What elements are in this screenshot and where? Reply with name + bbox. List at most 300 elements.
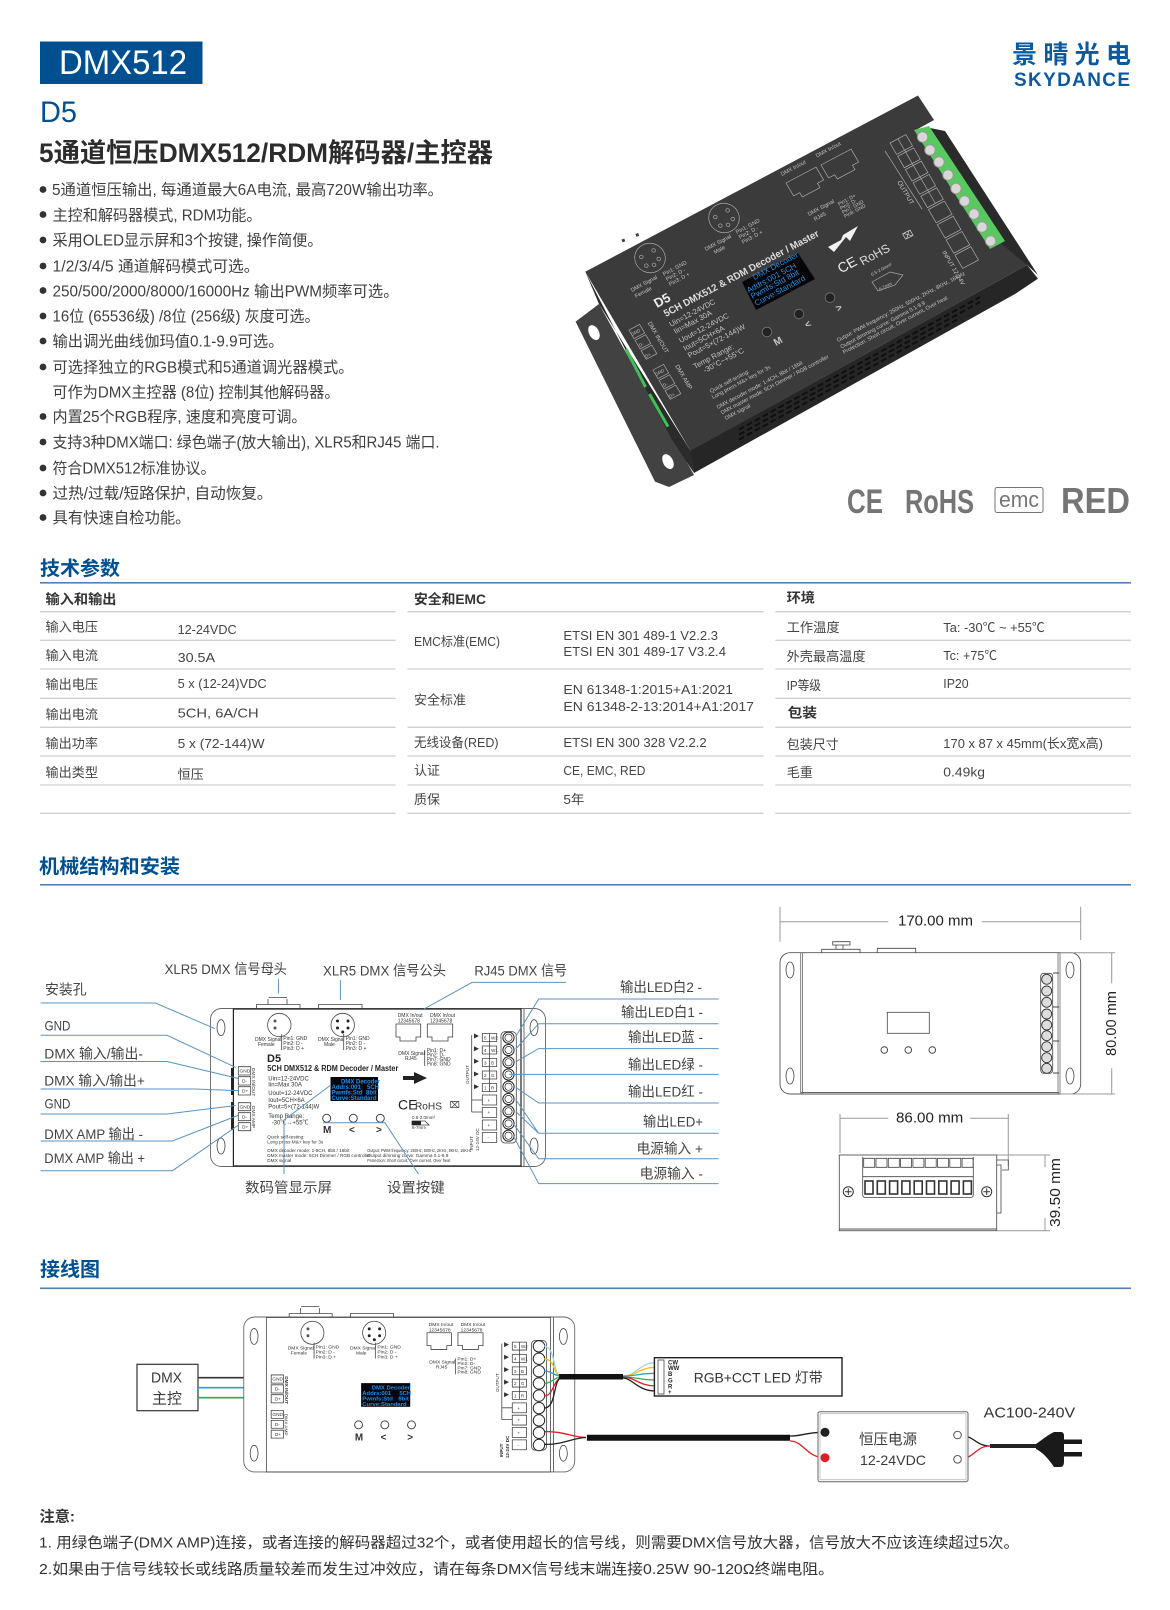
device schematic: Protection: Short circuit, Over current, Over heat <box>367 1158 451 1163</box>
device schematic: Temp Range: <box>268 1114 304 1120</box>
table column: input and output: 输入电压 <box>46 620 98 634</box>
device schematic: DMX Signal <box>429 1359 455 1365</box>
screen printing: DMX master mode: 5CH Dimmer / RGB controller <box>720 354 830 416</box>
device schematic: Curve:Standard <box>362 1402 407 1408</box>
LED strip box: CW <box>668 1360 678 1366</box>
device schematic: Pin3: D + <box>316 1354 336 1360</box>
device schematic: D+ <box>242 1088 248 1094</box>
device schematic: DMX AMP <box>283 1414 289 1436</box>
table column: environment and package: 环境 <box>787 590 815 606</box>
device schematic: W1 <box>491 1048 498 1053</box>
LED strip box <box>654 1358 842 1396</box>
output wires to LED strip <box>544 1346 655 1408</box>
device schematic: Pin2: D- <box>457 1361 475 1367</box>
table column: environment and package: 170 x 87 x 45mm(长x宽x高) <box>943 736 1103 751</box>
device schematic: 12345678 <box>429 1327 451 1333</box>
table column: input and output: 恒压 <box>178 767 204 782</box>
table column: input and output: 12-24VDC <box>178 622 237 637</box>
device schematic: DMX In/out <box>430 1013 456 1019</box>
device schematic: 2 <box>514 1381 517 1386</box>
signal wires <box>198 1378 271 1398</box>
device schematic: 0.5-2.0mm² <box>412 1115 436 1120</box>
device schematic: Pin1: GND <box>283 1036 308 1042</box>
callout labels: GND <box>44 1096 70 1112</box>
icon: AC plug <box>990 1432 1082 1467</box>
LED strip box: B <box>668 1372 673 1378</box>
device schematic: Iin=Max 30A <box>268 1082 302 1088</box>
device schematic: G <box>521 1381 525 1386</box>
feature list: 250/500/2000/8000/16000Hz 输出PWM频率可选。 <box>52 282 398 300</box>
screen printing: Pin8: GND <box>843 203 867 220</box>
table column: safety and EMC: EN 61348-1:2015+A1:2021 <box>563 682 733 697</box>
device schematic: INPUT <box>499 1443 504 1457</box>
device schematic: D+ <box>275 1396 281 1402</box>
section heading: 技术参数: 技术参数 <box>40 557 120 580</box>
device schematic: 3 <box>514 1369 517 1374</box>
green terminal left <box>626 349 668 427</box>
callout labels: XLR5 DMX 信号公头 <box>323 962 446 978</box>
device schematic: Pin2: D - <box>377 1350 397 1356</box>
device schematic: Male <box>324 1042 335 1048</box>
table column: environment and package <box>787 590 1103 780</box>
LED strip box: R <box>668 1384 673 1390</box>
callout labels: 安装孔 <box>45 982 87 998</box>
device schematic: 4 <box>484 1048 487 1053</box>
dimension drawing: top view <box>780 907 1120 1094</box>
device schematic: DMX In/out <box>461 1322 486 1328</box>
feature list: 过热/过载/短路保护, 自动恢复。 <box>52 484 272 502</box>
OLED screen: Curve:Standard <box>753 274 807 308</box>
device schematic: DMX Signal <box>350 1346 376 1352</box>
callout labels <box>44 961 703 1196</box>
screen printing: D5 <box>651 290 673 311</box>
callout labels: 输出LED白1 - <box>621 1004 703 1020</box>
table column: safety and EMC: CE, EMC, RED <box>563 763 645 778</box>
table column: safety and EMC: ETSI EN 301 489-1 V2.2.3 <box>563 628 718 643</box>
device schematic: DMX Decoder <box>341 1080 381 1086</box>
section heading: 接线图: 接线图 <box>40 1259 100 1281</box>
device schematic: W2 <box>521 1344 528 1349</box>
screen printing: Uout=12-24VDC <box>677 311 731 345</box>
header badge: DMX512: DMX512 <box>59 44 187 82</box>
screen printing: Quick self-testing: <box>709 369 751 395</box>
device schematic: DMX Signal <box>288 1346 314 1352</box>
device schematic: GND <box>272 1377 284 1383</box>
device schematic: Pin3: D + <box>283 1046 304 1052</box>
device schematic: Pin2: D - <box>346 1041 365 1047</box>
device schematic: 12-24V DC <box>475 1128 480 1151</box>
LED strip box: WW <box>668 1366 680 1372</box>
screen printing: DMX In/out <box>815 141 843 159</box>
device schematic: Pin1: GND <box>316 1345 340 1351</box>
device schematic <box>244 1307 575 1472</box>
callout labels: RJ45 DMX 信号 <box>474 962 567 978</box>
device schematic: 5 <box>514 1344 517 1349</box>
logo: SKYDANCE: SKYDANCE <box>1014 70 1130 91</box>
device schematic: OUTPUT <box>495 1373 500 1392</box>
OLED screen: DMX Decoder <box>751 250 800 282</box>
callout labels: DMX AMP 输出 - <box>44 1126 143 1142</box>
screen printing: RJ45 <box>813 212 827 223</box>
certification marks: CE <box>847 483 883 521</box>
device schematic: + <box>488 1098 490 1103</box>
table column: environment and package: 工作温度 <box>787 620 840 635</box>
callout labels: 数码管显示屏 <box>245 1180 332 1196</box>
feature list: 符合DMX512标准协议。 <box>52 460 216 478</box>
table column: environment and package: IP20 <box>943 676 969 691</box>
dimension drawing: end view <box>839 1110 1064 1231</box>
feature list <box>40 181 443 527</box>
table column: environment and package: 0.49kg <box>943 764 985 780</box>
table column: input and output: 5CH, 6A/CH <box>178 706 259 720</box>
device schematic: DMX Decoder <box>372 1386 411 1392</box>
table column: environment and package: IP等级 <box>787 678 821 693</box>
device schematic: D- <box>275 1422 280 1428</box>
device schematic: Pwmfs:Std <box>332 1090 363 1096</box>
callout labels: 电源输入 - <box>640 1166 703 1182</box>
screen printing: Pin1: GND <box>662 260 688 278</box>
logo: SKYDANCE <box>1012 41 1131 91</box>
feature list: 具有快速自检功能。 <box>52 509 190 527</box>
feature list: 可选择独立的RGB模式和5通道调光器模式。 <box>52 358 354 376</box>
screen printing: DMX Signal <box>704 234 733 253</box>
device schematic: Pin2: D - <box>283 1041 303 1047</box>
dimension drawing: top view: 80.00 mm <box>1104 991 1120 1056</box>
screen printing: Pin7: GND <box>841 199 865 216</box>
device schematic: D- <box>275 1387 280 1393</box>
screen printing: Pin1: D+ <box>837 193 857 207</box>
device schematic: R <box>491 1086 495 1090</box>
table column: input and output: 输入和输出 <box>46 591 116 607</box>
device schematic: D+ <box>275 1432 281 1438</box>
table column: input and output: 输出电流 <box>46 707 98 722</box>
device schematic: DMX master mode: 5CH Dimmer / RGB controller <box>267 1153 371 1158</box>
wiring diagram <box>137 1307 1082 1482</box>
screen printing: DMX In/out <box>780 159 808 178</box>
device schematic: 8bit <box>398 1396 409 1402</box>
device schematic: > <box>407 1432 413 1443</box>
table column: input and output: 输出电压 <box>46 677 98 692</box>
device schematic: OUTPUT <box>465 1065 470 1084</box>
table column: safety and EMC: 安全和EMC <box>414 591 486 607</box>
device schematic: INPUT <box>469 1136 474 1150</box>
device schematic: GND <box>272 1412 284 1418</box>
device schematic <box>210 998 546 1166</box>
screen printing: -30°C~+55°C <box>701 346 746 375</box>
device schematic: Pin3: D + <box>377 1354 398 1360</box>
screen printing: Long press M&+ key for 3s <box>711 365 772 401</box>
callout labels: 电源输入 + <box>636 1140 703 1156</box>
screen printing: 5CH DMX512 & RDM Decoder / Master <box>662 229 821 320</box>
table column: safety and EMC: EN 61348-2-13:2014+A1:2017 <box>563 699 754 714</box>
notes: 2.如果由于信号线较长或线路质量较差而发生过冲效应，请在每条DMX信号线末端连接0.25W 90-120Ω终端电阻。 <box>39 1560 834 1578</box>
table column: safety and EMC: ETSI EN 300 328 V2.2.2 <box>563 735 707 750</box>
feature list: 可作为DMX主控器 (8位) 控制其他解码器。 <box>52 384 340 402</box>
feature list: 支持3种DMX端口: 绿色端子(放大输出), XLR5和RJ45 端口. <box>52 434 440 452</box>
callout labels: 输出LED白2 - <box>620 979 702 995</box>
device schematic: Female <box>291 1351 307 1357</box>
product title: 5通道恒压DMX512/RDM解码器/主控器 <box>39 138 493 168</box>
green terminal right <box>914 126 1005 249</box>
device schematic: D+ <box>242 1124 248 1130</box>
top face <box>585 96 1027 451</box>
device schematic: Pin1: GND <box>377 1345 401 1351</box>
device schematic: + <box>488 1110 490 1115</box>
device schematic: DMX decoder mode: 1-8CH, 8bit / 16bit <box>267 1148 350 1153</box>
callout labels: GND <box>44 1017 70 1033</box>
device schematic: Male <box>356 1351 367 1357</box>
specification table <box>40 590 1131 813</box>
device schematic: Pin7: GND <box>457 1365 481 1371</box>
device schematic: 1 <box>484 1086 487 1090</box>
screen printing: GND <box>654 368 666 377</box>
dimension drawing: end view: 39.50 mm <box>1048 1158 1064 1227</box>
device schematic: Pin2: D- <box>427 1052 445 1058</box>
table column: safety and EMC: 无线设备(RED) <box>414 735 498 750</box>
certification marks: RoHS <box>905 483 974 520</box>
feature list: 采用OLED显示屏和3个按键, 操作简便。 <box>52 232 322 250</box>
screen printing: Protection: Short circuit, Over current, Over heat <box>842 295 949 356</box>
device schematic: 12345678 <box>461 1327 483 1333</box>
OLED screen: Addrs:001 5CH <box>745 261 798 295</box>
device schematic: Curve:Standard <box>332 1096 377 1102</box>
device schematic: M <box>323 1125 331 1136</box>
device schematic: Quick self-testing: <box>267 1134 305 1140</box>
screen printing: DMX signal <box>724 403 752 422</box>
certification marks <box>847 480 1130 521</box>
table column: safety and EMC: 认证 <box>414 763 440 778</box>
screen printing: Output dimming curve: Gamma 0.1-9.9 <box>840 301 927 350</box>
device schematic: 3 <box>484 1060 487 1066</box>
device schematic: Pin1: GND <box>346 1036 370 1042</box>
device schematic: Pwmfs:Std <box>362 1396 393 1402</box>
table column: input and output: 输入电流 <box>46 648 98 663</box>
table column: safety and EMC: 安全标准 <box>414 692 466 708</box>
device schematic: 6-7mm <box>412 1125 426 1130</box>
device schematic: Pin2: D - <box>316 1350 335 1356</box>
device schematic: 4 <box>514 1356 517 1361</box>
OLED screen <box>742 250 815 310</box>
callout labels: 输出LED绿 - <box>628 1056 703 1072</box>
feature list: 输出调光曲线伽玛值0.1-9.9可选。 <box>52 332 284 350</box>
device schematic: W2 <box>491 1036 498 1040</box>
device schematic: DMX In/out <box>429 1322 454 1328</box>
screen printing <box>630 141 967 422</box>
table column: safety and EMC: EMC标准(EMC) <box>414 634 500 649</box>
table column: environment and package: Ta: -30℃ ~ +55℃ <box>943 620 1045 635</box>
certification marks: emc <box>999 487 1039 512</box>
device schematic: DMX Signal <box>398 1051 425 1057</box>
LED strip box: + <box>668 1390 672 1396</box>
device schematic: DMX Signal <box>255 1037 281 1043</box>
callout labels: 输出LED蓝 - <box>628 1029 703 1045</box>
constant voltage power supply <box>818 1412 968 1482</box>
screen printing: < <box>803 319 814 331</box>
device schematic: Female <box>258 1042 275 1048</box>
device schematic: Uout=12-24VDC <box>268 1091 313 1097</box>
top plug <box>622 233 642 241</box>
device schematic: D5 <box>267 1053 281 1065</box>
feature list: 主控和解码器模式, RDM功能。 <box>52 206 262 224</box>
screen printing: INPUT 12-24V <box>940 250 965 287</box>
DMX controller box: 主控 <box>152 1390 182 1408</box>
screen printing: DMX IN/OUT <box>646 321 669 355</box>
screen printing: M <box>772 335 785 349</box>
screen printing: > <box>834 302 845 315</box>
device schematic: GND <box>240 1104 251 1110</box>
device schematic: Pin1: D+ <box>457 1356 476 1362</box>
screen printing: Pin2: D - <box>665 267 687 283</box>
table column: environment and package: 包装尺寸 <box>787 737 839 752</box>
table column: environment and package: 包装 <box>788 704 818 720</box>
power wires <box>545 1432 990 1459</box>
device schematic: 5 <box>484 1036 487 1040</box>
device schematic: + <box>488 1123 490 1128</box>
screen printing: GND <box>630 328 642 337</box>
callout labels: 输出LED红 - <box>628 1084 703 1100</box>
device schematic: Addrs:001 <box>362 1391 392 1397</box>
device schematic: Pout=5×(72-144)W <box>268 1104 320 1110</box>
callout labels: XLR5 DMX 信号母头 <box>165 961 287 977</box>
device schematic: D- <box>242 1114 247 1120</box>
screen printing: Iout=5CH×6A <box>681 324 726 353</box>
screen printing: D+ <box>668 392 676 399</box>
screen printing: DMX AMP <box>673 364 693 391</box>
callout leader lines <box>41 979 719 1184</box>
screen printing: Male <box>713 245 727 256</box>
device schematic: Output: PWM frequency: 250Hz, 500Hz, 2KHz, 8KHz, 16KHz <box>367 1148 472 1153</box>
device schematic: Long press M&+ key for 3s <box>267 1140 324 1144</box>
logo: SKYDANCE: 景晴光电 <box>1012 41 1131 69</box>
device schematic: DMX Signal <box>318 1037 344 1043</box>
device schematic: Uin=12-24VDC <box>268 1076 309 1082</box>
device schematic: Output dimming curve: Gamma 0.1-9.9 <box>367 1153 449 1158</box>
feature list: 16位 (65536级) /8位 (256级) 灰度可选。 <box>52 308 320 326</box>
device schematic: < <box>381 1432 387 1443</box>
table column: environment and package: Tc: +75℃ <box>943 648 997 663</box>
table column: input and output: 5 x (12-24)VDC <box>178 676 267 691</box>
screen printing: DMX Signal <box>807 199 836 218</box>
device schematic: G <box>491 1073 495 1078</box>
device schematic: RJ45 <box>436 1364 448 1370</box>
device schematic: > <box>376 1125 382 1136</box>
device schematic: - <box>488 1135 490 1140</box>
screen printing: Pin3: D + <box>741 230 764 246</box>
screen printing: 0.5-2.0mm² <box>870 262 893 277</box>
notes <box>39 1508 1019 1578</box>
side face with vents <box>690 265 1038 473</box>
notes: 注意: <box>40 1508 75 1526</box>
notes: 1. 用绿色端子(DMX AMP)连接，或者连接的解码器超过32个，或者使用超长的信号线，则需要DMX信号放大器，信号放大不应该连续超过5次。 <box>39 1534 1019 1552</box>
model name: D5 <box>40 96 77 129</box>
mechanical diagram: front panel with callouts <box>41 961 719 1196</box>
table column: input and output: 输出功率 <box>46 736 98 751</box>
screen printing: ⌧ <box>901 228 915 242</box>
device schematic: D- <box>242 1078 247 1084</box>
screen printing: Iin=Max 30A <box>672 308 714 336</box>
callout labels: DMX 输入/输出+ <box>44 1072 145 1088</box>
screen printing: DMX decoder mode: 1-4CH, 8bit / 16bit <box>716 360 805 411</box>
table column: environment and package: 毛重 <box>787 765 813 780</box>
table column: environment and package: 外壳最高温度 <box>787 649 866 664</box>
device schematic: + <box>517 1406 520 1411</box>
screen printing: Pout=5×(72-144)W <box>686 322 748 360</box>
device schematic: Iout=5CH×6A <box>268 1098 305 1104</box>
device schematic: CE <box>398 1096 417 1112</box>
device schematic: 12345678 <box>398 1018 420 1024</box>
device schematic: Pin8: GND <box>427 1062 451 1068</box>
screen printing: Female <box>634 286 653 300</box>
dimension drawing: top view: 170.00 mm <box>898 914 973 930</box>
device schematic: M <box>355 1432 363 1443</box>
screen printing: CE <box>834 253 860 276</box>
constant voltage power supply: 12-24VDC <box>860 1452 926 1468</box>
device schematic: DMX signal <box>267 1158 291 1163</box>
table column: input and output: 输出类型 <box>46 765 98 780</box>
device schematic: Addrs:001 <box>332 1085 362 1091</box>
screen printing: DMX Signal <box>630 275 659 294</box>
screen printing: Pin2: D - <box>738 225 760 241</box>
device schematic: 1 <box>514 1393 517 1398</box>
device schematic: Pin8: GND <box>457 1370 481 1376</box>
dimension drawing: end view: 86.00 mm <box>896 1110 963 1126</box>
LED strip box: RGB+CCT LED 灯带 <box>694 1370 823 1386</box>
DMX controller box <box>137 1364 198 1411</box>
table column: input and output: 5 x (72-144)W <box>178 736 265 751</box>
device schematic: - <box>517 1442 519 1447</box>
device schematic: 12-24V DC <box>505 1435 510 1458</box>
screen printing: D+ <box>644 352 652 359</box>
feature list: 1/2/3/4/5 通道解码模式可选。 <box>52 258 260 276</box>
table column: input and output <box>46 591 267 782</box>
device schematic: 2 <box>484 1073 487 1078</box>
device schematic: DMX IN/OUT <box>250 1068 256 1096</box>
device schematic: 12345678 <box>430 1018 452 1024</box>
device schematic: B <box>521 1369 524 1374</box>
device schematic: Pin3: D + <box>346 1046 366 1052</box>
screen printing: Pin1: GND <box>735 218 761 236</box>
device schematic: 5CH DMX512 & RDM Decoder / Master <box>267 1064 398 1073</box>
DMX controller box: DMX <box>151 1370 182 1386</box>
screen printing: RoHS <box>857 241 892 268</box>
flange right <box>925 127 1038 275</box>
table column: safety and EMC: 质保 <box>414 792 440 807</box>
device schematic: B <box>491 1060 494 1066</box>
device schematic: + <box>517 1430 520 1435</box>
buttons <box>762 293 835 337</box>
LED strip box: G <box>668 1378 673 1384</box>
screen printing: Pin3: D + <box>668 272 691 288</box>
device schematic: R <box>521 1393 525 1398</box>
screen printing: 6-7mm <box>878 281 893 292</box>
screen printing: D- <box>662 381 669 388</box>
device schematic: 5CH <box>367 1085 379 1091</box>
device schematic: DMX In/out <box>398 1013 423 1019</box>
callout labels: DMX 输入/输出- <box>44 1046 143 1062</box>
feature list: 内置25个RGB程序, 速度和亮度可调。 <box>52 408 306 426</box>
table column: safety and EMC: ETSI EN 301 489-17 V3.2.4 <box>563 644 726 659</box>
OLED screen: Pwmfs:Std 8bit <box>749 268 801 301</box>
XLR and RJ45 outlines <box>629 135 979 399</box>
device schematic: Pin1: D+ <box>427 1048 446 1054</box>
callout labels: DMX AMP 输出 + <box>44 1150 145 1166</box>
device schematic: RJ45 <box>405 1056 417 1062</box>
screen printing: OUTPUT <box>895 180 915 206</box>
table column: safety and EMC <box>414 591 754 807</box>
screen printing: Uin=12-24VDC <box>667 297 717 329</box>
device schematic: W1 <box>521 1356 528 1361</box>
icon: DMX arrow <box>828 226 858 252</box>
